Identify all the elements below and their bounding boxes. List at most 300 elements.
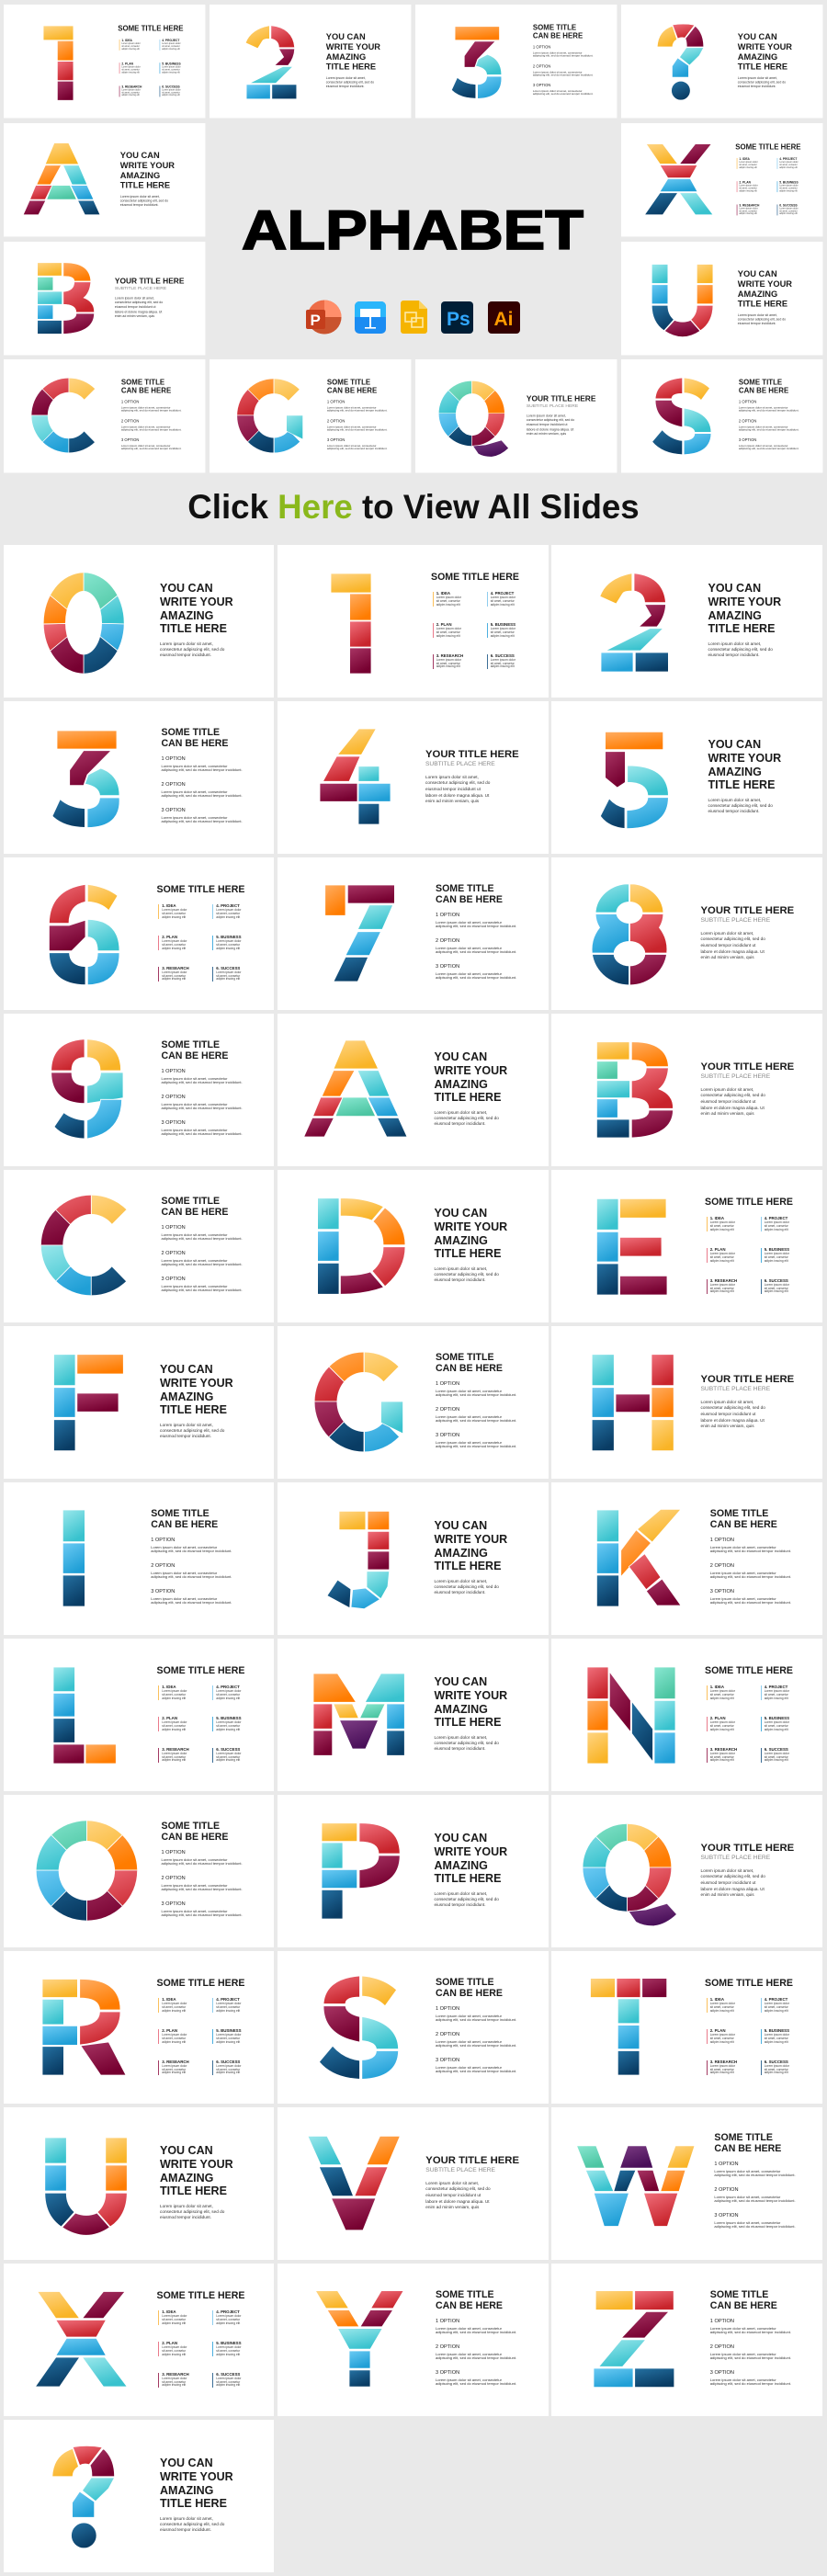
panel: slide P (278, 1795, 548, 1947)
letter graphic: 3 (53, 731, 119, 827)
letter graphic: 5 (601, 732, 668, 829)
text block: Lorem ipsum dolor sit amet, consectetur (436, 2014, 502, 2018)
text block: consectetur adipiscing elit, sed do (434, 1897, 499, 1901)
text block: adipiscing elit, sed do eiusmod tempor incididunt. (151, 1600, 232, 1605)
panel: slide E: 1. IDEA (710, 1216, 724, 1220)
text block: 2 OPTION (710, 1563, 734, 1569)
text block (162, 1821, 243, 1918)
panel: slide 6: sit amet, consetur (216, 943, 240, 947)
panel: slide 6: sit amet, consetur (216, 912, 240, 915)
text block: Lorem ipsum dolor sit amet, consectetur (151, 1545, 217, 1549)
text block: 2 OPTION (121, 419, 139, 424)
text block: SOME TITLE HERE (705, 1978, 793, 1989)
panel: slide T: 6. SUCCESS (765, 2060, 788, 2064)
text block: CAN BE HERE (436, 2300, 503, 2311)
text block: adipiscing elit, sed do eiusmod tempor incididunt. (121, 428, 182, 431)
preview: slide 3 (415, 5, 617, 118)
text block: TITLE HERE (160, 1403, 227, 1416)
text block: adipiscing elit, sed do eiusmod tempor incididunt. (533, 92, 594, 96)
letter graphic: question mark (51, 2446, 114, 2548)
panel: slide X: sit amet, consetur (162, 2380, 186, 2384)
text block: WRITE YOUR (434, 1845, 507, 1858)
letter graphic: 1 (43, 26, 74, 101)
text block: YOUR TITLE HERE (700, 1061, 794, 1072)
text block: 2 OPTION (533, 64, 550, 69)
panel: slide 6: 1. IDEA (162, 903, 176, 908)
preview: slide X: sit amet, consetur (739, 210, 757, 212)
text block: SOME TITLE HERE (735, 143, 801, 151)
panel: slide 1: Lorem ipsum dolor (491, 596, 515, 599)
panel: slide X: sit amet, consetur (162, 2349, 186, 2353)
text block: adipiscing elit, sed do eiusmod tempor incididunt. (533, 74, 594, 76)
text block: adipiscing elit, sed do eiusmod tempor incididunt. (162, 1912, 243, 1917)
text block: SOME TITLE HERE (705, 1665, 793, 1676)
text block: Lorem ipsum dolor sit amet, consectetur (327, 444, 376, 448)
panel: slide E: sit amet, consetur (765, 1255, 788, 1259)
panel: slide R: 6. SUCCESS (216, 2060, 240, 2064)
text block: consectetur adipiscing elit, sed do (160, 1428, 224, 1433)
panel: slide 8 (551, 857, 821, 1010)
panel: slide L: Lorem ipsum dolor (162, 1752, 187, 1755)
panel: slide 1: 6. SUCCESS (491, 653, 515, 658)
letter graphic: D (317, 1197, 405, 1295)
text block (325, 32, 380, 88)
text block: AMAZING (434, 1547, 488, 1560)
panel: slide N: adipim inscing elit (710, 1728, 734, 1731)
text block: SUBTITLE PLACE HERE (700, 917, 770, 924)
preview: slide X: sit amet, consetur (779, 210, 798, 212)
text block (151, 1508, 232, 1606)
panel: slide R: sit amet, consetur (162, 2068, 186, 2071)
text block: YOU CAN (738, 32, 777, 41)
panel: slide T: sit amet, consetur (710, 2037, 734, 2040)
preview: slide X: 4. PROJECT (779, 157, 797, 161)
preview: slide X (621, 123, 822, 236)
text block: Lorem ipsum dolor sit amet, (738, 76, 777, 80)
text block: Lorem ipsum dolor sit amet, consectetur (739, 425, 787, 428)
panel: slide R: adipim inscing elit (162, 2009, 186, 2013)
text block: CAN BE HERE (162, 1050, 228, 1061)
text block: AMAZING (160, 609, 213, 622)
panel: slide S (278, 1951, 548, 2104)
text block: 1 OPTION (162, 1850, 186, 1855)
text block: TITLE HERE (434, 1872, 501, 1885)
text block: Lorem ipsum dolor sit amet, consectetur (714, 2169, 780, 2173)
letter graphic: 6 (50, 884, 119, 985)
panel: slide T: sit amet, consetur (710, 2005, 734, 2009)
text block: adipiscing elit, sed do eiusmod tempor incididunt. (436, 2330, 516, 2334)
text block: Lorem ipsum dolor sit amet, (708, 641, 761, 646)
preview: slide X: Lorem ipsum dolor (779, 207, 799, 210)
text block: Lorem ipsum dolor sit amet, (160, 2204, 213, 2208)
panel: slide L: adipim inscing elit (216, 1758, 240, 1762)
text block: YOU CAN (160, 582, 213, 595)
text block (436, 883, 516, 981)
preview: slide X: adipim inscing elit (739, 212, 757, 215)
text block: YOU CAN (434, 1050, 487, 1063)
letter graphic: 7 (324, 885, 395, 982)
text block: consectetur adipiscing elit, sed do (425, 2186, 491, 2191)
text block: 3 OPTION (436, 2058, 459, 2063)
text block (436, 1977, 516, 2074)
preview: slide X: sit amet, consetur (779, 187, 798, 189)
letter graphic: 4 (320, 729, 391, 824)
text block: Lorem ipsum dolor sit amet, consectetur (121, 405, 170, 409)
text block: adipiscing elit, sed do eiusmod tempor incididunt. (162, 1131, 243, 1136)
text block: WRITE YOUR (434, 1220, 507, 1233)
text block: adipiscing elit, sed do eiusmod tempor incididunt. (436, 1392, 516, 1397)
panel: slide L: 6. SUCCESS (216, 1747, 240, 1752)
panel: slide E: adipim inscing elit (710, 1289, 734, 1293)
text block: Lorem ipsum dolor sit amet, consectetur (714, 2195, 780, 2199)
preview: slide S (621, 359, 822, 472)
text block: consectetur adipiscing elit, sed do (700, 936, 765, 941)
text block: SOME TITLE (327, 379, 370, 387)
letter graphic: F (53, 1354, 123, 1451)
preview: slide 1: Lorem ipsum dolor (162, 88, 181, 91)
text block: WRITE YOUR (160, 2470, 233, 2483)
panel: slide 6: 6. SUCCESS (216, 966, 240, 970)
text block: CAN BE HERE (710, 1519, 777, 1530)
text block: 3 OPTION (162, 1120, 186, 1126)
panel: slide 6: Lorem ipsum dolor (162, 908, 187, 912)
panel: slide N: sit amet, consetur (710, 1724, 734, 1728)
panel: slide T: adipim inscing elit (710, 2009, 734, 2013)
panel: slide E: Lorem ipsum dolor (765, 1252, 789, 1255)
panel: slide T: adipim inscing elit (710, 2071, 734, 2074)
text block: AMAZING (738, 289, 777, 299)
panel: slide L: 3. RESEARCH (162, 1747, 189, 1752)
panel: slide T: Lorem ipsum dolor (765, 2002, 789, 2005)
icon: Photoshop: Ps (447, 309, 470, 330)
text block: adipiscing elit, sed do eiusmod tempor incididunt. (436, 1444, 516, 1448)
panel: slide L: sit amet, consetur (162, 1755, 186, 1759)
text block: adipiscing elit, sed do eiusmod tempor incididunt. (714, 2224, 796, 2229)
text block: consectetur adipiscing elit, sed do (160, 2522, 224, 2526)
panel: slide E: 2. PLAN (710, 1247, 726, 1252)
text block: adipiscing elit, sed do eiusmod tempor incididunt. (714, 2173, 796, 2177)
text block: TITLE HERE (434, 1091, 501, 1104)
letter graphic: T (590, 1978, 667, 2075)
text block: CAN BE HERE (436, 1363, 503, 1374)
text block: enim ad minim veniam, quis (115, 314, 154, 317)
text block (533, 24, 594, 96)
panel: slide 5 (551, 701, 821, 854)
panel: slide X: Lorem ipsum dolor (162, 2345, 187, 2349)
text block: labore et dolore magna aliqua. Ut (527, 427, 573, 431)
text block: CAN BE HERE (436, 894, 503, 905)
letter graphic: W (576, 2145, 695, 2227)
text block (739, 379, 799, 450)
panel: slide T: 5. BUSINESS (765, 2028, 789, 2033)
preview: slide 1: sit amet, consetur (162, 68, 180, 71)
text block: consectetur adipiscing elit, sed do (326, 81, 374, 84)
panel: slide X: Lorem ipsum dolor (216, 2314, 241, 2318)
panel: slide N: 2. PLAN (710, 1716, 726, 1720)
panel: slide L: sit amet, consetur (162, 1724, 186, 1728)
panel: slide 1: Lorem ipsum dolor (436, 627, 461, 630)
preview: slide 1: adipim inscing elit (121, 94, 140, 96)
text block (737, 32, 792, 88)
text block: SOME TITLE (151, 1508, 210, 1519)
text block: YOU CAN (160, 1363, 213, 1376)
panel: slide E: adipim inscing elit (710, 1228, 734, 1231)
panel: slide R: Lorem ipsum dolor (216, 2064, 241, 2068)
text block: TITLE HERE (160, 2497, 227, 2510)
text block: SUBTITLE PLACE HERE (115, 286, 166, 290)
panel: slide N: Lorem ipsum dolor (765, 1689, 789, 1693)
text block: SOME TITLE (533, 24, 576, 32)
panel: slide L (4, 1639, 274, 1791)
text block: Lorem ipsum dolor sit amet, consectetur (710, 2326, 776, 2331)
text block: TITLE HERE (434, 1716, 501, 1729)
letter graphic: S (652, 379, 711, 454)
icon: PowerPoint (306, 300, 342, 335)
text block: adipiscing elit, sed do eiusmod tempor incididunt. (436, 2017, 516, 2022)
call to action: Click Here to View All Slides: Click Here to View All Slides (187, 488, 640, 526)
text block: 1 OPTION (710, 1538, 734, 1543)
text block: Lorem ipsum dolor sit amet, consectetur (533, 51, 582, 54)
panel: slide L: 4. PROJECT (216, 1685, 240, 1689)
panel: slide X: Lorem ipsum dolor (162, 2377, 187, 2380)
text block: SOME TITLE (710, 2289, 768, 2300)
text block: 1 OPTION (436, 2006, 459, 2012)
text block: SOME TITLE HERE (156, 1665, 244, 1676)
panel: slide E: 3. RESEARCH (710, 1278, 737, 1283)
text block: WRITE YOUR (120, 161, 175, 170)
text block: consectetur adipiscing elit, sed do (700, 1874, 765, 1878)
text block: Lorem ipsum dolor sit amet, consectetur (710, 2352, 776, 2356)
panel: slide 1: sit amet, consetur (491, 630, 515, 634)
text block: Lorem ipsum dolor sit amet, (527, 414, 566, 417)
letter graphic: I (62, 1510, 85, 1606)
text block: Lorem ipsum dolor sit amet, consectetur (436, 1414, 502, 1419)
text block: AMAZING (326, 52, 366, 62)
panel: slide 7 (278, 857, 548, 1010)
text block: TITLE HERE (326, 62, 376, 72)
preview: slide X: adipim inscing elit (779, 212, 798, 215)
text block: SOME TITLE (739, 379, 782, 387)
text block: adipiscing elit, sed do eiusmod tempor incididunt. (714, 2198, 796, 2203)
text block: 2 OPTION (162, 1876, 186, 1881)
text block: Lorem ipsum dolor sit amet, consectetur (436, 2039, 502, 2044)
text block: CAN BE HERE (710, 2300, 777, 2311)
panel: slide 6: Lorem ipsum dolor (162, 970, 187, 974)
text block: Lorem ipsum dolor sit amet, consectetur (710, 2377, 776, 2382)
letter graphic: L (53, 1667, 116, 1764)
text block: TITLE HERE (160, 2184, 227, 2197)
panel: slide G (278, 1326, 548, 1479)
panel: slide 6: Lorem ipsum dolor (216, 970, 241, 974)
text block: consectetur adipiscing elit, sed do (434, 1741, 499, 1745)
letter graphic: M (313, 1674, 404, 1755)
preview: slide X: Lorem ipsum dolor (739, 161, 758, 164)
panel: slide 1: sit amet, consetur (491, 662, 515, 665)
panel: slide T: Lorem ipsum dolor (765, 2064, 789, 2068)
text block (160, 1363, 233, 1439)
text block: eiusmod tempor incididunt. (434, 1902, 486, 1907)
text block: eiusmod tempor incididunt. (160, 1434, 211, 1438)
text block: adipiscing elit, sed do eiusmod tempor incididunt. (710, 1574, 791, 1579)
text block (737, 268, 792, 325)
text block (434, 1050, 507, 1127)
text block: labore et dolore magna aliqua. Ut (700, 1887, 765, 1891)
panel: slide T: Lorem ipsum dolor (765, 2033, 789, 2037)
text block: eiusmod tempor incididunt. (708, 809, 760, 813)
text block: Lorem ipsum dolor sit amet, consectetur (714, 2220, 780, 2225)
text block: CAN BE HERE (151, 1519, 218, 1530)
text block: eiusmod tempor incididunt. (708, 653, 760, 657)
preview: slide X: 2. PLAN (739, 180, 751, 184)
panel: slide N: Lorem ipsum dolor (765, 1720, 789, 1724)
text block: TITLE HERE (120, 181, 170, 190)
panel: slide L: Lorem ipsum dolor (216, 1689, 241, 1693)
text block: 3 OPTION (710, 1589, 734, 1594)
panel: slide 6: 4. PROJECT (216, 903, 240, 908)
panel: slide N: 4. PROJECT (765, 1685, 787, 1689)
panel: slide R: Lorem ipsum dolor (162, 2002, 187, 2005)
text block: YOU CAN (434, 1675, 487, 1688)
text block: 1 OPTION (121, 400, 139, 404)
panel: slide T: 1. IDEA (710, 1997, 724, 2002)
text block: labore et dolore magna aliqua. Ut (700, 1106, 765, 1110)
panel: slide R: sit amet, consetur (216, 2037, 240, 2040)
text block: Lorem ipsum dolor sit amet, (700, 1868, 753, 1873)
text block: 1 OPTION (436, 913, 459, 918)
text block: 1 OPTION (436, 1381, 459, 1387)
text block: adipiscing elit, sed do eiusmod tempor incididunt. (162, 1080, 243, 1084)
text block: Lorem ipsum dolor sit amet, (160, 2516, 213, 2521)
text block: 3 OPTION (162, 808, 186, 813)
text block: enim ad minim veniam, quis (700, 1892, 754, 1897)
panel: slide L: adipim inscing elit (162, 1697, 186, 1700)
text block: AMAZING (120, 171, 160, 180)
preview: slide X: Lorem ipsum dolor (739, 207, 758, 210)
text block: Lorem ipsum dolor sit amet, consectetur (162, 1883, 227, 1888)
panel: slide E: sit amet, consetur (710, 1287, 734, 1290)
letter graphic: U (44, 2138, 127, 2235)
preview: slide X: sit amet, consetur (739, 187, 757, 189)
panel: slide T: adipim inscing elit (765, 2040, 788, 2044)
panel: slide E: Lorem ipsum dolor (710, 1220, 735, 1224)
preview: slide 1: 1. IDEA (121, 39, 132, 42)
panel: slide N: adipim inscing elit (710, 1758, 734, 1762)
preview: slide 1: Lorem ipsum dolor (162, 42, 181, 45)
text block: eiusmod tempor incididunt ut (700, 1099, 755, 1104)
text block: Lorem ipsum dolor sit amet, consectetur (162, 1076, 227, 1081)
letter graphic: 8 (592, 884, 666, 985)
panel: slide 1: adipim inscing elit (491, 603, 515, 607)
panel: slide 6: sit amet, consetur (216, 974, 240, 978)
text block: Lorem ipsum dolor sit amet, consectetur (710, 1596, 776, 1601)
letter graphic: B (38, 263, 94, 335)
panel: slide R: 5. BUSINESS (216, 2028, 242, 2033)
text block (708, 738, 781, 813)
text block: TITLE HERE (160, 622, 227, 635)
text block: SUBTITLE PLACE HERE (700, 1073, 770, 1080)
text block: eiusmod tempor incididunt. (160, 2527, 211, 2532)
text block: WRITE YOUR (160, 2158, 233, 2171)
preview: slide 1: 4. PROJECT (162, 39, 179, 42)
text block (527, 395, 595, 436)
panel: slide E: Lorem ipsum dolor (710, 1252, 735, 1255)
letter graphic: 2 (246, 26, 296, 99)
panel: slide T: adipim inscing elit (710, 2040, 734, 2044)
text block: CAN BE HERE (436, 1988, 503, 1999)
panel: slide L: adipim inscing elit (216, 1728, 240, 1731)
text block: 3 OPTION (162, 1901, 186, 1907)
text block: YOUR TITLE HERE (527, 395, 595, 403)
preview: slide X: sit amet, consetur (779, 164, 798, 166)
text block: 3 OPTION (327, 438, 345, 443)
panel: slide 6: adipim inscing elit (216, 947, 240, 950)
panel: slide 1: 3. RESEARCH (436, 653, 463, 658)
panel: slide E: Lorem ipsum dolor (710, 1283, 735, 1287)
preview: slide X: adipim inscing elit (779, 189, 798, 192)
text block: 3 OPTION (436, 1433, 459, 1438)
text block (118, 25, 184, 97)
preview: slide 1: sit amet, consetur (121, 91, 140, 94)
icon: Keynote (355, 301, 386, 334)
panel: slide 1: sit amet, consetur (491, 599, 515, 603)
panel: slide 1: 5. BUSINESS (491, 622, 515, 627)
text block: adipiscing elit, sed do eiusmod tempor incididunt. (436, 2069, 516, 2073)
panel: slide X: adipim inscing elit (162, 2353, 186, 2356)
panel: slide E: 6. SUCCESS (765, 1278, 788, 1283)
text block: Lorem ipsum dolor sit amet, consectetur (162, 1284, 227, 1288)
text block: YOUR TITLE HERE (425, 2155, 519, 2166)
text block: labore et dolore magna aliqua. Ut (115, 310, 162, 312)
panel: slide 6: adipim inscing elit (162, 977, 186, 981)
text block (710, 1508, 791, 1606)
panel: slide 1: Lorem ipsum dolor (436, 658, 461, 662)
letter graphic: B (596, 1041, 674, 1138)
text block (700, 1061, 794, 1118)
text block: SOME TITLE (436, 1352, 494, 1363)
text block: Lorem ipsum dolor sit amet, (434, 1891, 487, 1896)
panel: slide R: adipim inscing elit (216, 2071, 240, 2074)
text block: Lorem ipsum dolor sit amet, consectetur (162, 1909, 227, 1913)
panel: slide X: adipim inscing elit (216, 2383, 240, 2387)
text block: CAN BE HERE (162, 1207, 228, 1218)
panel: slide E: sit amet, consetur (710, 1255, 734, 1259)
text block: 1 OPTION (436, 2319, 459, 2324)
panel: slide L: 5. BUSINESS (216, 1716, 242, 1720)
text block: YOUR TITLE HERE (115, 277, 184, 285)
text block: consectetur adipiscing elit, sed do (700, 1405, 765, 1410)
panel: slide R (4, 1951, 274, 2104)
text block: 3 OPTION (436, 964, 459, 970)
text block: consectetur adipiscing elit, sed do (160, 2209, 224, 2214)
panel: slide 6: adipim inscing elit (162, 947, 186, 950)
text block: Lorem ipsum dolor sit amet, consectetur (327, 425, 376, 428)
text block: 2 OPTION (436, 938, 459, 944)
panel: slide X: 6. SUCCESS (216, 2372, 240, 2377)
text block: Lorem ipsum dolor sit amet, consectetur (436, 2065, 502, 2070)
panel: slide X: 2. PLAN (162, 2341, 177, 2345)
panel: slide 1: adipim inscing elit (436, 634, 460, 638)
panel: slide N (551, 1639, 821, 1791)
preview: slide X: adipim inscing elit (779, 166, 798, 169)
panel: slide X: sit amet, consetur (216, 2349, 240, 2353)
panel: slide R: sit amet, consetur (162, 2005, 186, 2009)
text block: Lorem ipsum dolor sit amet, consectetur (436, 2326, 502, 2331)
preview: slide X: adipim inscing elit (739, 166, 757, 169)
preview: slide question mark (621, 5, 822, 118)
text block: CAN BE HERE (739, 387, 788, 395)
panel: slide E: adipim inscing elit (765, 1289, 788, 1293)
text block: AMAZING (160, 2484, 213, 2497)
